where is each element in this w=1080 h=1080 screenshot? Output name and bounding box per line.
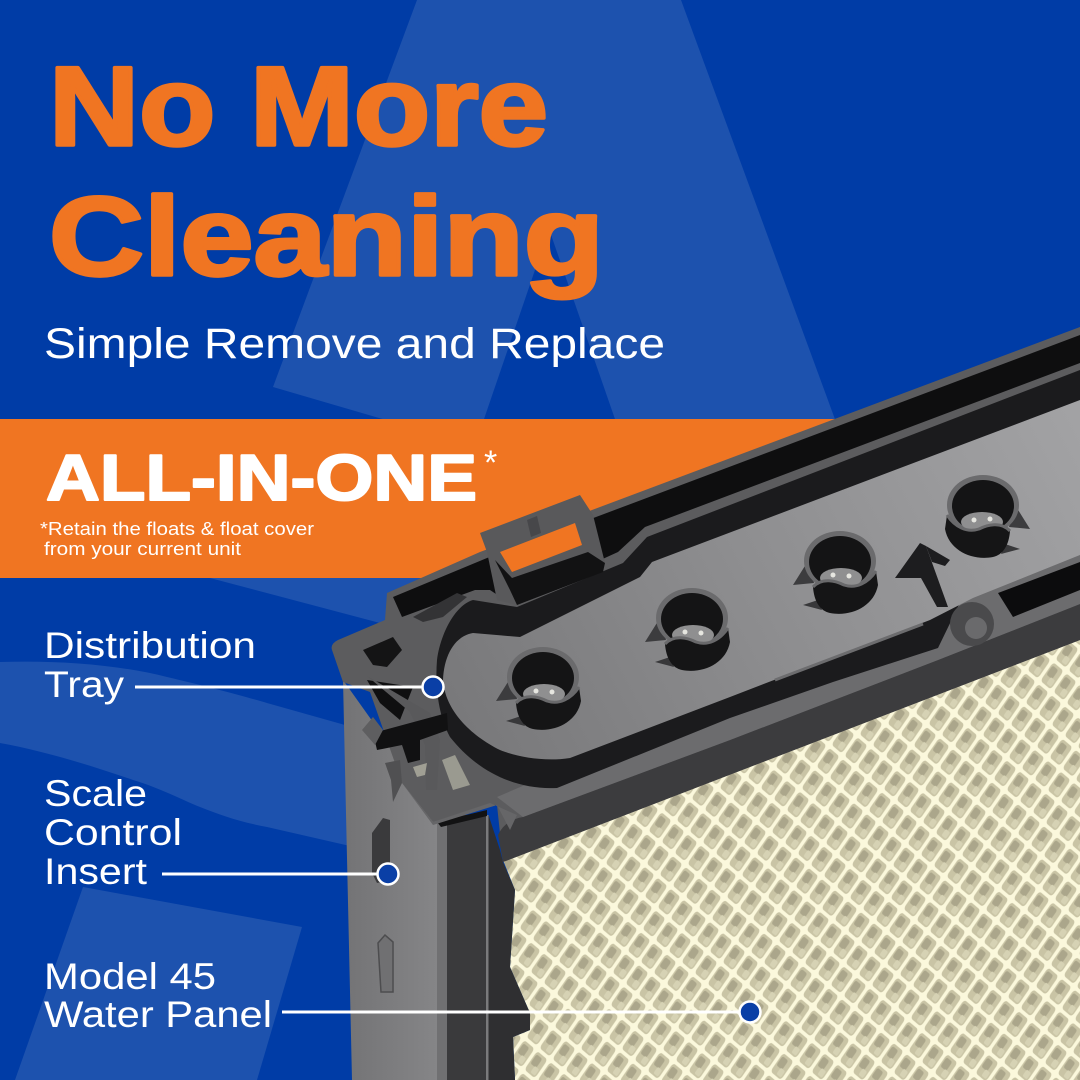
right band (497, 555, 1080, 817)
tray floor (443, 400, 1080, 759)
float peg (895, 543, 994, 646)
title: No More (49, 44, 548, 169)
side post (343, 680, 530, 1080)
label: scale control insert: Control (44, 812, 182, 853)
label: model 45 water panel: Water Panel (44, 994, 272, 1035)
title: Cleaning (49, 174, 604, 299)
tray front face (498, 604, 1080, 862)
pin (378, 935, 393, 992)
label: model 45 water panel: Model 45 (44, 956, 216, 997)
label: distribution tray (44, 625, 444, 705)
scale control slot (372, 818, 390, 883)
footnote: from your current unit (44, 539, 241, 559)
footnote (40, 519, 314, 559)
top snap tab (480, 495, 605, 605)
clip 3 (793, 531, 878, 614)
label: distribution tray: Distribution (44, 625, 256, 666)
title (49, 44, 604, 299)
orange banner (0, 419, 1080, 578)
top channel (393, 335, 1080, 617)
label: distribution tray: Tray (44, 664, 125, 705)
clip 4 (945, 475, 1030, 558)
label: scale control insert: Scale (44, 773, 147, 814)
right slot (998, 562, 1080, 617)
mesh water panel (503, 637, 1080, 1080)
label: scale control insert (44, 773, 398, 892)
all-in-one heading: ALL-IN-ONE (46, 441, 477, 514)
all-in-one heading: * (484, 444, 497, 482)
product: water panel with tray (332, 327, 1080, 1080)
clip 2 (645, 588, 730, 671)
corner detail (362, 593, 517, 830)
subtitle: Simple Remove and Replace (44, 320, 665, 368)
clip 1 (496, 647, 581, 730)
tray wall ring (436, 370, 1080, 788)
strip under floor (775, 624, 923, 680)
footnote: *Retain the floats & float cover (40, 519, 314, 539)
tray body (332, 327, 1080, 862)
background pattern shapes (0, 0, 836, 1080)
label: scale control insert: Insert (44, 851, 148, 892)
label: model 45 water panel (44, 956, 760, 1035)
